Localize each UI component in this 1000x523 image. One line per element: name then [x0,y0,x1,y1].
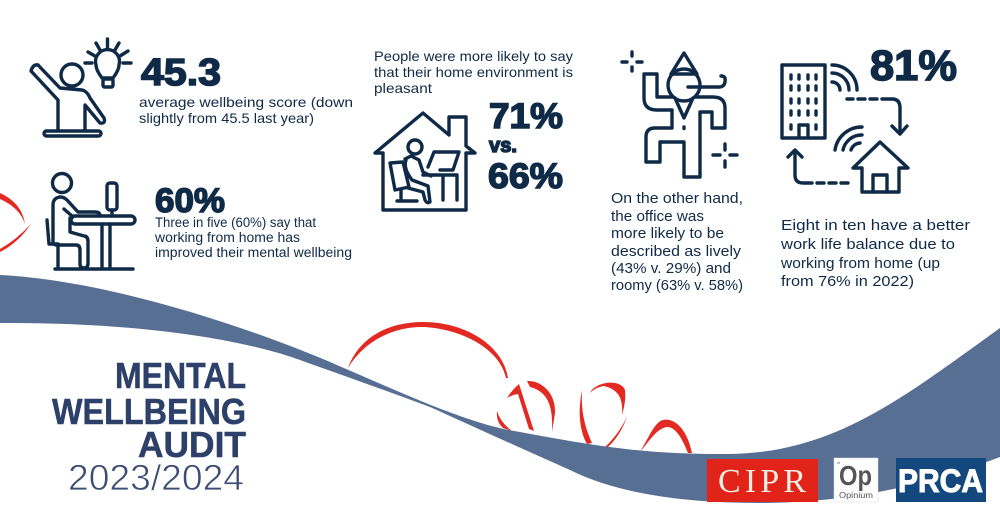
text: home environment: that their home environment is [374,64,573,80]
text: office lively and roomy [611,191,743,294]
text: working from home: improved their mental wellbeing [155,245,352,260]
text: work life balance [780,217,970,290]
logo: Opinium: of [837,460,841,465]
text: working from home: Three in five (60%) say that [155,215,316,230]
title: 2023/2024 [68,457,244,498]
stat: 81%: 81% [870,42,957,90]
text: work life balance: work life balance due to [780,236,955,253]
logo: Opinium: Op [839,460,872,491]
icon: office and home with wifi [782,65,908,192]
stat: 66%: 66% [488,157,563,196]
icon: person at desk [47,174,135,269]
text: office lively and roomy: more likely to be [611,226,724,242]
text: working from home: working from home has [154,230,300,245]
logo: PRCA: PRCA [898,463,983,499]
logo: CIPR: CIPR [718,463,806,500]
title: MENTAL [115,355,246,396]
stat: 60%: 60% [155,182,225,220]
stat: 71%: 71% [489,97,563,136]
text: home environment: People were more likely to say [374,48,573,64]
text: home environment [374,48,573,96]
text: office lively and roomy: the office was [611,209,704,225]
logo: CIPR [707,459,818,502]
red ribbon loops [0,193,692,453]
title: AUDIT [138,424,246,465]
logo: Opinium [834,458,878,502]
text: wellbeing score [139,94,353,126]
title [52,355,246,498]
blue wave ribbon [0,275,1000,503]
text: wellbeing score: average wellbeing score (down [139,94,353,110]
icon: person working in house [375,113,475,210]
text: work life balance: Eight in ten have a better [781,217,970,234]
text: office lively and roomy: (43% v. 29%) and [611,261,731,277]
text: home environment: pleasant [374,80,432,96]
icon: dancing figure [622,52,737,177]
text: work life balance: from 76% in 2022) [781,273,914,290]
text: wellbeing score: slightly from 45.5 last year) [139,110,314,126]
text: work life balance: working from home (up [780,255,940,272]
text: vs.: vs. [489,135,517,157]
text: office lively and roomy: described as lively [611,244,742,260]
text: working from home [154,215,352,260]
title: WELLBEING [52,391,246,432]
logo: Opinium: Opinium [839,491,873,500]
icon: person with light bulb [31,39,131,136]
stat: 45.3: 45.3 [141,52,221,94]
text: office lively and roomy: roomy (63% v. 58%) [611,278,743,294]
text: office lively and roomy: On the other hand, [611,191,743,207]
